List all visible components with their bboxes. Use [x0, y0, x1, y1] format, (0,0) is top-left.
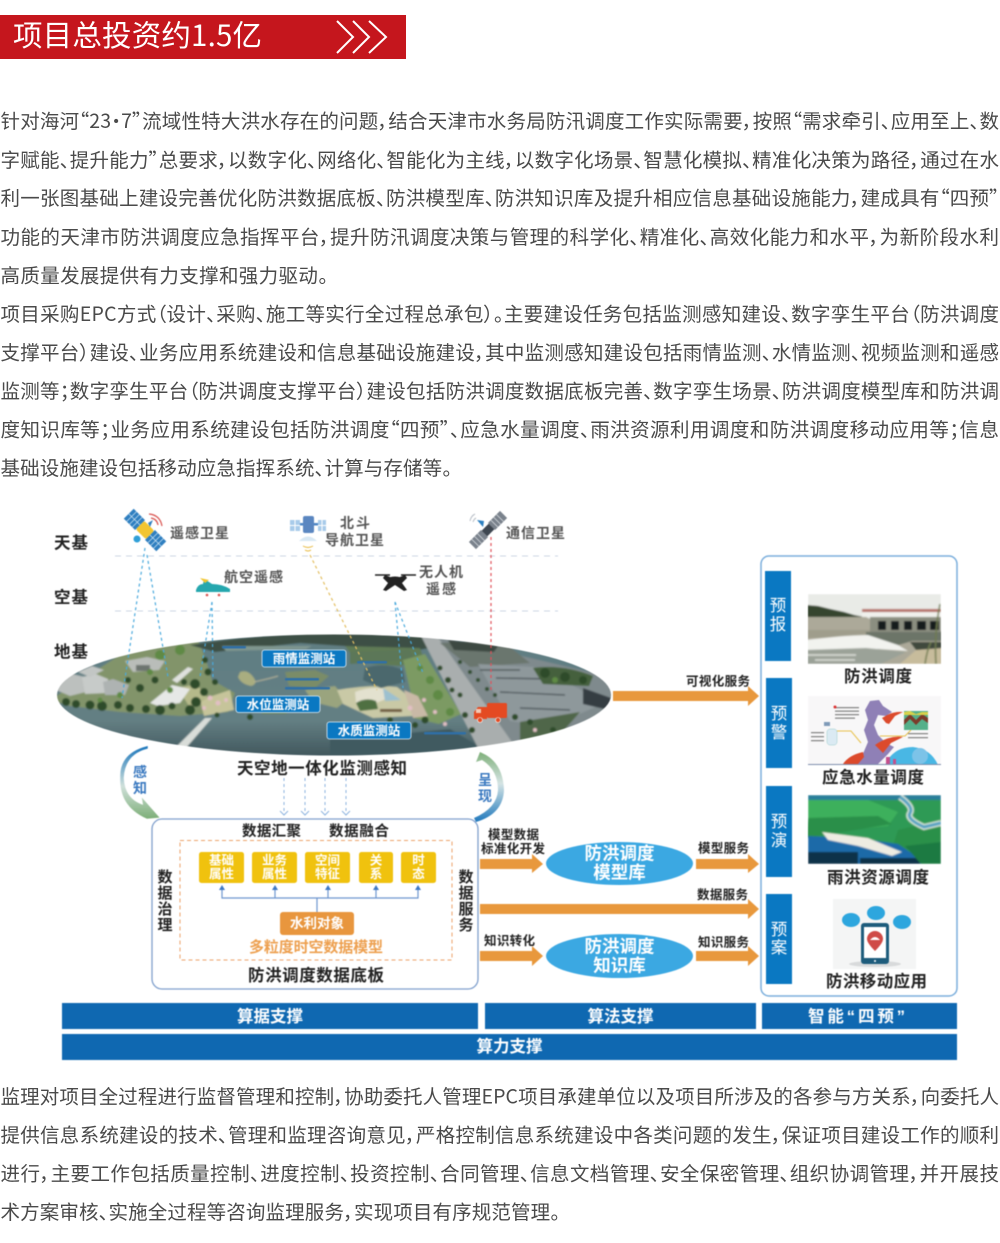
- icon: survey aircraft: [196, 578, 230, 596]
- text block: construction scope: 基础设施建设包括移动应急指挥系统、计算与存储等。: [0, 452, 452, 481]
- text block: supervision: 进行，主要工作包括质量控制、进度控制、投资控制、合同管理、信息文档管理、安全保密管理、组织协调管理，并开展技: [0, 1158, 999, 1186]
- station label: water level: [236, 696, 320, 712]
- bar: computing support: [62, 1034, 957, 1060]
- tab: rehearsal: 演: [771, 831, 787, 850]
- arrow: knowledge service: [696, 934, 759, 966]
- sub-headings: 数据融合: [329, 822, 390, 840]
- arc arrow: sensing: [121, 747, 158, 818]
- text block: project background: 针对海河“23·7”流域性特大洪水存在的问题，结合天津市水务局防汛调度工作实际需要，按照“需求牵引、应用至上、数: [0, 105, 999, 134]
- sub-headings: [242, 822, 390, 840]
- bar: computing support: 算力支撑: [476, 1036, 543, 1056]
- arc arrow: sensing: 感: [133, 764, 147, 780]
- tier labels: sky, air, ground: 地基: [54, 642, 88, 662]
- tier labels: sky, air, ground: 空基: [54, 587, 88, 607]
- bar: data support: [62, 1003, 478, 1029]
- small islands: [238, 671, 255, 686]
- large island: [337, 686, 419, 718]
- side label: data service: 服: [458, 901, 474, 918]
- panel: four pre applications: [761, 556, 957, 996]
- model caption: 多粒度时空数据模型: [249, 938, 383, 956]
- text block: construction scope: 支撑平台）建设、业务应用系统建设和信息基础设施建设，其中监测感知建设包括雨情监测、水情监测、视频监测和遥感: [0, 336, 999, 366]
- attribute boxes: 属性: [262, 866, 287, 881]
- tab: warning: 警: [771, 723, 787, 742]
- station label: water level: 水位监测站: [247, 697, 310, 712]
- side label: data service: 据: [458, 884, 474, 902]
- tab: warning: 预: [771, 704, 787, 723]
- arrow: data service: 数据服务: [697, 887, 748, 902]
- label: BeiDou satellite: 导航卫星: [325, 532, 384, 548]
- grey buildings: [56, 673, 86, 696]
- attribute boxes: 特征: [315, 866, 340, 881]
- text block: project background: [0, 105, 999, 288]
- text block: supervision: 提供信息系统建设的技术、管理和监理咨询意见，严格控制信息系统建设中各类问题的发生，保证项目建设工作的顺利: [0, 1119, 999, 1148]
- arc arrow: sensing: 知: [133, 780, 147, 796]
- text block: supervision: 术方案审核、实施全过程等咨询监理服务，实现项目有序规范管理。: [0, 1196, 560, 1225]
- arrow: model data: 模型数据: [488, 827, 539, 842]
- icon: red truck: [474, 703, 507, 722]
- photo: river fields: [806, 795, 941, 864]
- panel: flood data base: [152, 819, 478, 989]
- bar: algorithm support: 算法支撑: [588, 1006, 654, 1026]
- icon: mobile app: [833, 899, 916, 969]
- text block: construction scope: 度知识库等；业务应用系统建设包括防洪调度“四预”、应急水量调度、雨洪资源利用调度和防洪调度移动应用等；信息: [0, 414, 999, 442]
- tab: forecast: 报: [770, 615, 786, 634]
- right lake pond: [363, 665, 405, 688]
- left bank: [50, 640, 235, 716]
- caption: flood dispatch: 防洪调度: [844, 666, 912, 686]
- arrow: model service: 模型服务: [698, 840, 749, 856]
- attribute boxes: 业务: [262, 852, 287, 868]
- ellipse: knowledge library: 防洪调度: [584, 936, 654, 956]
- far shore: [190, 632, 430, 652]
- arrow: model data: 标准化开发: [481, 841, 545, 856]
- label: drone remote sensing: 遥感: [426, 581, 456, 597]
- icon: BeiDou satellite: [290, 516, 326, 551]
- arrow: knowledge conversion: [480, 933, 543, 966]
- side label: data governance: 数: [157, 869, 173, 886]
- ellipse: model library: 防洪调度: [584, 844, 654, 864]
- text block: project background: 利一张图基础上建设完善优化防洪数据底板、防洪模型库、防洪知识库及提升相应信息基础设施能力，建成具有“四预”: [0, 182, 999, 211]
- bar: data support: 算据支撑: [237, 1006, 304, 1026]
- tier labels: sky, air, ground: [54, 534, 558, 662]
- caption: mobile application: 防洪移动应用: [826, 971, 927, 991]
- side label: data service: 务: [458, 916, 474, 934]
- arc arrow: presenting: [474, 752, 504, 822]
- arc arrow: presenting: 现: [478, 788, 492, 804]
- icon: drone: [375, 575, 416, 591]
- text block: supervision: 监理对项目全过程进行监督管理和控制，协助委托人管理EPC项目承建单位以及项目所涉及的各参与方关系，向委托人: [0, 1080, 999, 1110]
- tab: forecast: 预: [770, 596, 786, 615]
- attribute boxes: 时: [412, 854, 425, 868]
- water object box: 水利对象: [290, 915, 344, 931]
- label: BeiDou satellite: 北斗: [340, 515, 370, 531]
- road: [420, 634, 517, 750]
- photo: flood dam: [806, 594, 942, 664]
- station label: rain: 雨情监测站: [273, 651, 336, 666]
- tab: forecast: [765, 571, 791, 661]
- tab: plan: 预: [771, 920, 787, 939]
- station label: water quality: 水质监测站: [338, 723, 401, 738]
- side label: data governance: 治: [157, 900, 173, 918]
- tab: rehearsal: 预: [771, 812, 787, 831]
- tiny map markers: [222, 646, 466, 734]
- bar: intelligent four pre: [762, 1003, 957, 1029]
- title text: 项目总投资约1.5亿: [13, 13, 262, 55]
- text block: construction scope: 监测等；数字孪生平台（防洪调度支撑平台）建设包括防洪调度数据底板完善、数字孪生场景、防洪调度模型库和防洪调: [0, 375, 999, 404]
- heading: integrated monitoring: 天空地一体化监测感知: [237, 758, 407, 778]
- text block: supervision: [0, 1080, 999, 1225]
- label: aerial remote sensing: 航空遥感: [224, 569, 283, 585]
- tab: rehearsal: [766, 786, 792, 877]
- side label: data governance: 理: [157, 917, 173, 934]
- arrow: data service: [480, 887, 759, 919]
- label: communication satellite: 通信卫星: [506, 525, 565, 541]
- attribute boxes: 系: [370, 866, 382, 881]
- station label: rain: [262, 650, 346, 667]
- attribute boxes: 属性: [209, 866, 234, 881]
- arrows: data down: [280, 778, 350, 815]
- label: BeiDou satellite: [325, 515, 384, 548]
- arrow: model service: [696, 840, 759, 873]
- tab: plan: 案: [771, 938, 788, 957]
- attribute boxes: 基础: [209, 852, 234, 868]
- dashed model box: [180, 840, 452, 960]
- arrow: model data: [480, 827, 545, 873]
- arrow: knowledge conversion: 知识转化: [484, 933, 535, 948]
- tree clusters: [62, 657, 587, 733]
- attribute boxes: 空间: [315, 852, 340, 868]
- side label: data governance: [157, 869, 173, 934]
- side label: data service: [458, 869, 474, 934]
- bar: intelligent four pre: 智能“四预”: [808, 1006, 905, 1026]
- connector tree: [219, 885, 421, 912]
- panel caption: 防洪调度数据底板: [248, 965, 384, 985]
- ellipse: model library: [546, 842, 693, 885]
- icon: triple chevron: [337, 21, 386, 53]
- text block: project background: 字赋能、提升能力”总要求，以数字化、网络化、智能化为主线，以数字化场景、智慧化模拟、精准化决策为路径，通过在水: [0, 144, 999, 173]
- icon: communication satellite: [469, 511, 507, 549]
- icon: remote sensing satellite: [124, 509, 166, 551]
- photo: emergency water map: [808, 696, 941, 765]
- attribute boxes: 态: [412, 866, 425, 881]
- ellipse: knowledge library: 知识库: [593, 956, 646, 976]
- water object box: [280, 912, 354, 935]
- tab: warning: [766, 678, 792, 768]
- tab: plan: [766, 894, 792, 984]
- arrow: knowledge service: 知识服务: [698, 934, 749, 950]
- text block: construction scope: 项目采购EPC方式（设计、采购、施工等实行全过程总承包）。主要建设任务包括监测感知建设、数字孪生平台（防洪调度: [0, 298, 999, 327]
- title banner: [0, 13, 406, 59]
- bar: algorithm support: [485, 1003, 756, 1029]
- label: drone remote sensing: 无人机: [419, 564, 463, 580]
- station label: water quality: [327, 722, 411, 739]
- attribute boxes: 关: [370, 852, 383, 868]
- architecture diagram: [50, 509, 957, 1060]
- ellipse: model library: 模型库: [593, 862, 646, 882]
- arrow: visualization service: [613, 674, 759, 706]
- text block: project background: 功能的天津市防洪调度应急指挥平台，提升防汛调度决策与管理的科学化、精准化、高效化能力和水平，为新阶段水利: [0, 221, 999, 250]
- text block: project background: 高质量发展提供有力支撑和强力驱动。: [0, 260, 328, 288]
- arrow: visualization service: 可视化服务: [686, 674, 750, 688]
- ellipse: knowledge library: [546, 934, 693, 978]
- side label: data governance: 据: [157, 884, 173, 902]
- caption: rain-flood resources: 雨洪资源调度: [827, 868, 930, 887]
- monitoring ellipse: aerial scene: [50, 632, 617, 759]
- label: remote sensing satellite: 遥感卫星: [170, 525, 229, 541]
- tier labels: sky, air, ground: 天基: [54, 534, 88, 552]
- text block: construction scope: [0, 298, 999, 481]
- label: drone remote sensing: [419, 564, 463, 597]
- dotted sensing lines: [122, 537, 491, 698]
- attribute boxes: [199, 852, 436, 883]
- side label: data service: 数: [458, 869, 474, 886]
- caption: emergency water dispatch: 应急水量调度: [822, 767, 924, 787]
- arc arrow: presenting: 呈: [478, 772, 492, 788]
- sub-headings: 数据汇聚: [242, 822, 302, 840]
